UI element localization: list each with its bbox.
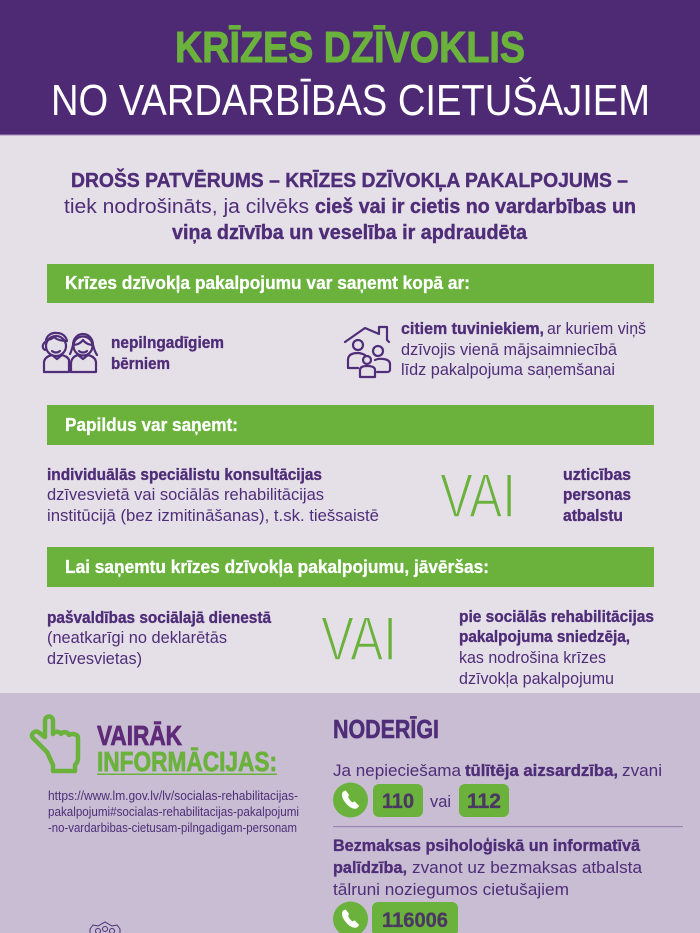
text: free support: palīdzība, xyxy=(333,858,407,877)
badge: 112 xyxy=(459,784,509,817)
section bar: jāvēršas: Lai saņemtu krīzes dzīvokļa pakalpojumu, jāvēršas: xyxy=(65,557,489,577)
intro text: viņa dzīvība un veselība ir apdraudēta xyxy=(172,222,528,244)
icon: phone xyxy=(333,782,368,818)
text: trusted person: atbalstu xyxy=(563,506,623,525)
badge: 116006 xyxy=(372,902,458,933)
text: provider xyxy=(459,607,654,688)
intro text xyxy=(64,168,636,244)
text: social service: (neatkarīgi no deklarētās xyxy=(47,628,227,647)
icon: ministry emblem xyxy=(90,922,120,933)
intro text: cieš vai ir cietis no vardarbības un xyxy=(315,196,636,218)
text: provider: pie sociālās rehabilitācijas xyxy=(459,607,654,626)
text: consultations: institūcijā (bez izmitināšanas), t.sk. tiešsaistē xyxy=(47,506,379,525)
label: relatives: ar kuriem viņš xyxy=(547,319,646,338)
label: relatives xyxy=(401,319,646,379)
text: immediate protection: Ja nepieciešama xyxy=(333,761,462,780)
header band xyxy=(0,0,700,136)
label: relatives: dzīvojis vienā mājsaimniecībā xyxy=(401,340,618,359)
badge: 112: 112 xyxy=(467,790,501,813)
VAI separator 2: VAI xyxy=(321,605,397,674)
label: children: nepilngadīgiem xyxy=(111,333,224,352)
text: free support: Bezmaksas psiholoģiskā un informatīvā xyxy=(333,836,641,855)
bottom panel xyxy=(0,693,700,933)
text: provider: pakalpojuma sniedzēja, xyxy=(459,627,630,646)
label: relatives: citiem tuviniekiem, xyxy=(401,319,544,338)
icon: phone 2 xyxy=(333,902,368,933)
heading: more information: INFORMĀCIJAS: xyxy=(97,746,277,777)
text: provider: dzīvokļa pakalpojumu xyxy=(459,669,614,688)
icon: children xyxy=(43,333,97,372)
heading: more information: VAIRĀK xyxy=(97,720,182,751)
section bar: kopā ar: Krīzes dzīvokļa pakalpojumu var saņemt kopā ar: xyxy=(65,273,470,293)
link: -no-vardarbibas-cietusam-pilngadigam-personam xyxy=(48,821,297,835)
text: free support xyxy=(333,836,643,899)
icon: pointing hand xyxy=(32,716,78,771)
section bar: jāvēršas xyxy=(47,547,654,587)
text: trusted person xyxy=(563,465,631,525)
intro text: DROŠS PATVĒRUMS – KRĪZES DZĪVOKĻA PAKALPOJUMS – xyxy=(71,168,628,192)
link: https://www.lm.gov.lv/lv/socialas-rehabilitacijas- xyxy=(48,789,298,803)
intro text: tiek nodrošināts, ja cilvēks xyxy=(64,196,309,218)
text: or: vai xyxy=(430,792,451,811)
section bar: papildus xyxy=(47,405,654,445)
text: immediate protection: zvani xyxy=(622,761,662,780)
text: consultations xyxy=(47,465,379,525)
text: consultations: dzīvesvietā vai sociālās rehabilitācijas xyxy=(47,485,324,504)
text: trusted person: personas xyxy=(563,485,631,504)
icon: family in house xyxy=(345,327,390,377)
text: provider: kas nodrošina krīzes xyxy=(459,648,606,667)
text: trusted person: uzticības xyxy=(563,465,631,484)
text: free support: tālruni noziegumos cietušajiem xyxy=(333,880,569,899)
label: children: bērniem xyxy=(111,354,170,373)
section bar: papildus: Papildus var saņemt: xyxy=(65,415,238,435)
text: consultations: individuālās speciālistu konsultācijas xyxy=(47,465,322,484)
text: immediate protection: tūlītēja aizsardzība, xyxy=(465,761,618,780)
heading: useful: NODERĪGI xyxy=(333,714,439,744)
text: social service: pašvaldības sociālajā dienestā xyxy=(47,608,271,627)
heading: more information xyxy=(97,720,277,777)
label: relatives: līdz pakalpojuma saņemšanai xyxy=(401,360,615,379)
badge: 110 xyxy=(373,784,423,817)
link xyxy=(48,789,299,835)
section bar: kopā ar xyxy=(47,264,654,303)
badge: 110: 110 xyxy=(382,790,414,813)
badge: 116006: 116006 xyxy=(382,909,448,932)
text: social service: dzīvesvietas) xyxy=(47,649,142,668)
VAI separator: VAI xyxy=(440,462,516,531)
link: pakalpojumi#socialas-rehabilitacijas-pakalpojumi xyxy=(48,805,299,819)
text: free support: zvanot uz bezmaksas atbalsta xyxy=(412,858,643,877)
text: immediate protection xyxy=(333,761,662,780)
label: children xyxy=(111,333,224,373)
title line 1: KRĪZES DZĪVOKLIS xyxy=(175,23,525,72)
text: social service xyxy=(47,608,271,668)
